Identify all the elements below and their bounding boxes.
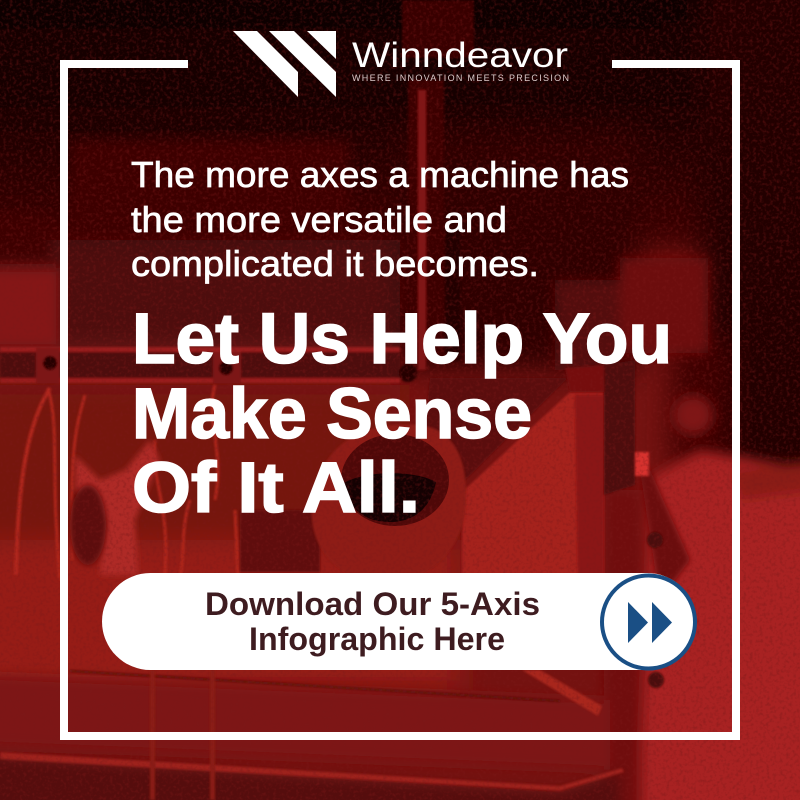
spindle xyxy=(402,0,474,370)
headline: Of It All. xyxy=(132,449,420,528)
intro text: the more versatile and xyxy=(131,199,507,240)
drip streaks xyxy=(16,385,238,580)
block face xyxy=(462,392,604,580)
dark lower-left blotch xyxy=(70,485,106,565)
button label: Download Our 5-Axis xyxy=(205,586,540,622)
lower bright diagonal xyxy=(522,670,602,716)
headline: Let Us Help You xyxy=(132,300,672,379)
headline xyxy=(132,300,672,528)
machined hole xyxy=(312,424,466,583)
icon: W mark xyxy=(233,31,336,97)
wordmark: Winndeavor xyxy=(352,36,568,75)
icon: fast-forward circle xyxy=(602,576,695,668)
download button xyxy=(102,573,696,670)
intro text: The more axes a machine has xyxy=(131,154,629,195)
logo xyxy=(233,31,569,97)
pill xyxy=(102,573,696,670)
button label: Infographic Here xyxy=(249,621,505,657)
dark speckled recess xyxy=(420,378,568,490)
intro text xyxy=(131,154,629,284)
frame xyxy=(64,64,736,736)
intro text: complicated it becomes. xyxy=(131,243,539,284)
horizontal rail xyxy=(0,347,417,384)
tagline: WHERE INNOVATION MEETS PRECISION xyxy=(352,73,569,83)
lower bands xyxy=(0,670,624,800)
headline: Make Sense xyxy=(132,375,532,454)
button label xyxy=(205,586,540,657)
pale drip xyxy=(75,440,160,575)
